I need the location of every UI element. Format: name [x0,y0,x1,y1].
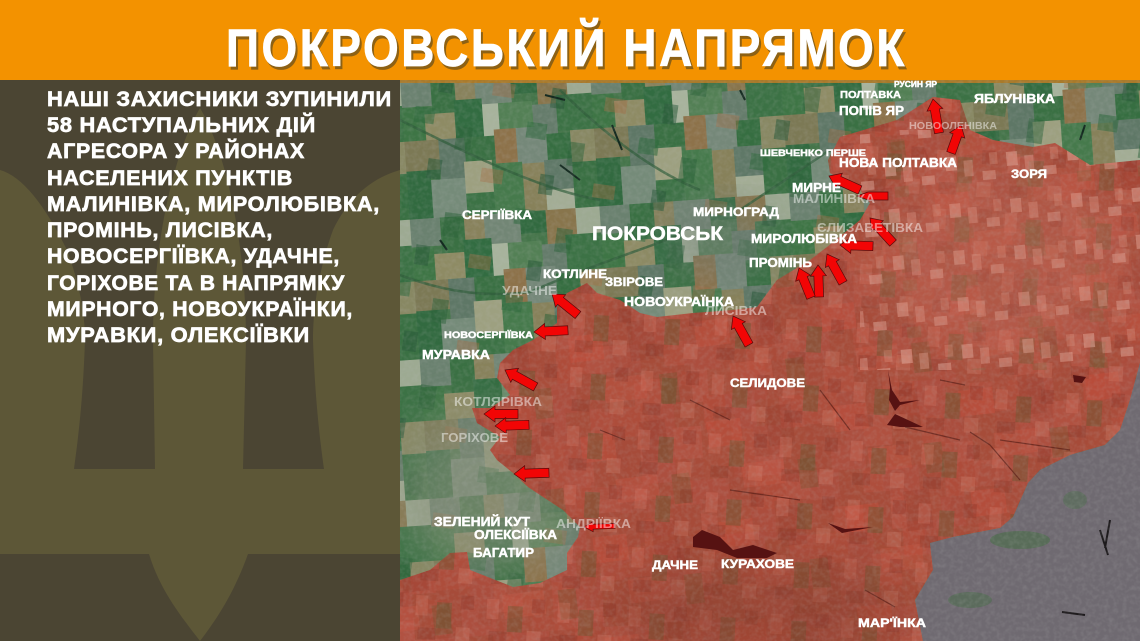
urban grey zone [915,363,1140,641]
label: Myrnohrad: МИРНОГРАД [693,205,779,219]
farmland base [400,80,1140,641]
label: Pokrovsk: ПОКРОВСЬК [592,224,723,245]
summary text block: НАСЕЛЕНИХ ПУНКТІВ [47,167,293,190]
label: Myroliubivka: МИРОЛЮБІВКА [751,232,857,246]
label: Malynivka: МАЛИНІВКА [793,191,876,206]
occupied-zone tint [400,80,1140,641]
label: Horikhove: ГОРІХОВЕ [441,431,508,445]
arrow: Myroliubivka [840,237,873,254]
label: Shevchenko Pershe: ШЕВЧЕНКО ПЕРШЕ [760,148,866,159]
label: Zelenyi Kut: ЗЕЛЕНИЙ КУТ [434,514,530,529]
arrow: Andriivka [584,521,615,532]
label: Marinka: МАР'ЇНКА [858,615,926,630]
arrow: south of Horikhove [514,465,549,482]
arrow: Rusyn Yar [926,98,944,134]
trident emblem watermark [0,108,400,641]
summary text block: МУРАВКИ, ОЛЕКСІЇВКИ [47,324,310,347]
label: Myrne: МИРНЕ [792,181,841,195]
label: Muravka: МУРАВКА [422,348,490,362]
label: Udachne: УДАЧНЕ [502,284,557,298]
label: Yelyzavetivka: ЄЛИЗАВЕТІВКА [817,220,924,235]
summary text block [47,88,392,347]
header band [0,0,1140,80]
label: Nova Poltavka: НОВА ПОЛТАВКА [839,156,957,170]
satellite map [400,80,1140,641]
left panel background [0,80,400,641]
label: Kotliarivka: КОТЛЯРІВКА [454,395,542,409]
arrow: Promin west [795,268,816,300]
label: Kurakhove: КУРАХОВЕ [721,557,794,571]
label: Popiv Yar: ПОПІВ ЯР [839,104,904,118]
label: Novoserhiivka: НОВОСЕРГІЇВКА [444,330,533,341]
arrow: Novooleksiivka [946,124,966,155]
arrow: Myrne [828,172,862,194]
label: Dachne: ДАЧНЕ [652,558,698,572]
summary text block: МАЛИНІВКА, МИРОЛЮБІВКА, [47,193,380,216]
attack arrows [484,98,969,532]
label: Promin: ПРОМІНЬ [749,256,812,270]
summary text block: МИРНОГО, НОВОУКРАЇНКИ, [47,298,353,321]
label: Novoolenivka: НОВООЛЕНІВКА [909,120,997,132]
summary text block: АГРЕСОРА У РАЙОНАХ [47,139,305,163]
label: Bahatyr: БАГАТИР [473,546,534,560]
title: ПОКРОВСЬКИЙ НАПРЯМОК [226,17,907,78]
arrow: Novoserhiivka [534,322,568,340]
label: Zvirove: ЗВІРОВЕ [605,275,663,289]
reservoir and ravines [693,370,1086,558]
texture [400,80,1140,641]
label: Yablunivka: ЯБЛУНІВКА [974,92,1055,106]
arrow: Promin east [825,254,848,286]
label: Lysivka: ЛИСІВКА [705,304,767,318]
summary text block: ГОРІХОВЕ ТА В НАПРЯМКУ [47,272,345,295]
label: Zorya: ЗОРЯ [1011,167,1047,181]
label: Kotlyne: КОТЛИНЕ [543,267,607,281]
label: Andriivka: АНДРІЇВКА [556,516,631,531]
summary text block: НАШІ ЗАХИСНИКИ ЗУПИНИЛИ [47,88,392,111]
label: Serhiivka: СЕРГІЇВКА [462,207,532,222]
settlement labels [422,80,1055,630]
summary text block: ПРОМІНЬ, ЛИСІВКА, [47,219,273,242]
label: Novoukrainka: НОВОУКРАЇНКА [624,294,734,309]
summary text block: 58 НАСТУПАЛЬНИХ ДІЙ [47,113,316,137]
label: Selydove: СЕЛИДОВЕ [730,376,805,390]
arrow: Lysivka [730,316,754,348]
arrow: Horikhove [495,417,529,434]
arrow: Muravka [504,368,538,392]
arrow: Yelyzavetivka [870,218,897,246]
label: Rusyn Yar: РУСИН ЯР [894,80,938,89]
arrow: Promin centre [810,265,827,297]
summary text block: НОВОСЕРГІЇВКА, УДАЧНЕ, [47,245,340,268]
arrow: Malynivka back [857,192,888,200]
arrow: Kotliarivka [484,406,518,422]
label: Poltavka: ПОЛТАВКА [840,89,901,101]
arrow: Udachne [552,294,582,319]
label: Oleksiivka: ОЛЕКСІЇВКА [474,527,557,542]
